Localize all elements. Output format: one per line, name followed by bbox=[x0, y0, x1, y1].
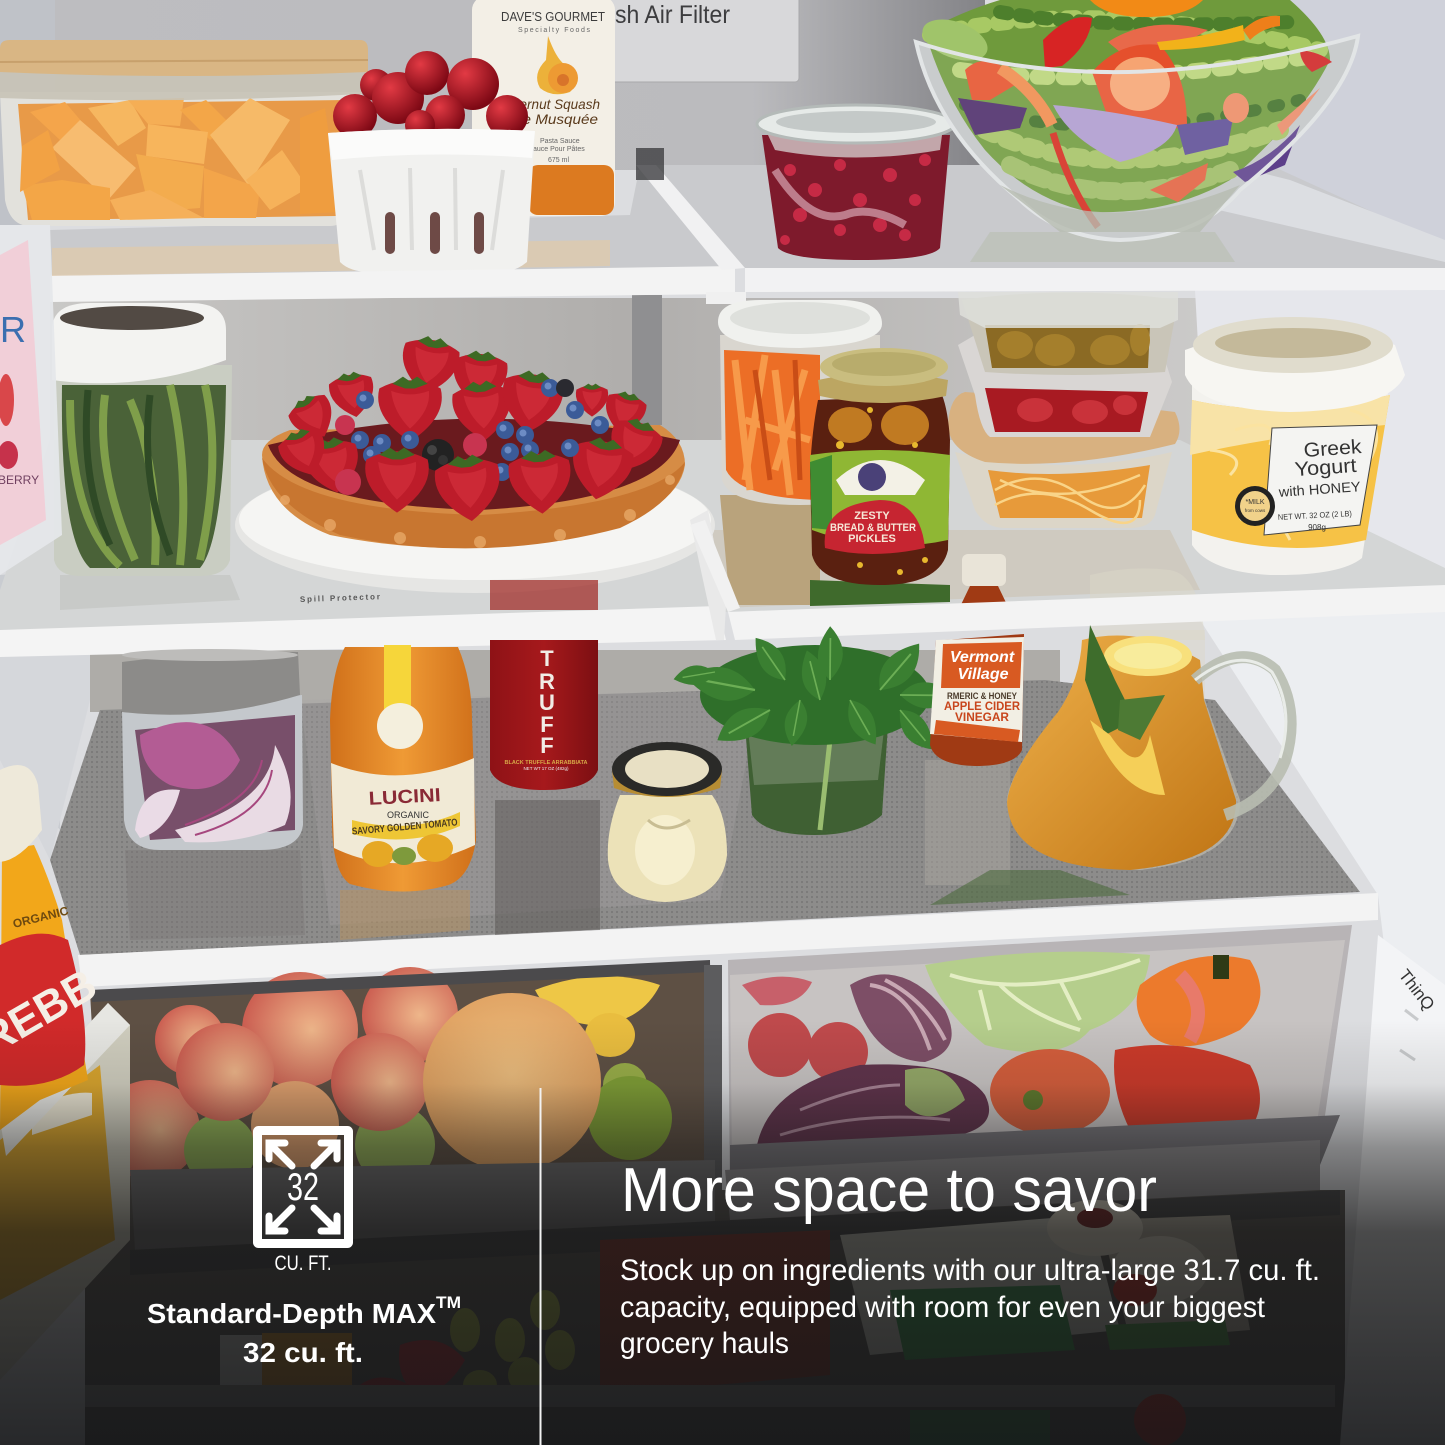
salad bowl bbox=[916, 0, 1358, 240]
Vermont Village vinegar bottle: Village bbox=[958, 666, 1009, 683]
cherries and white basket bbox=[328, 51, 535, 272]
third level mesh floor bbox=[50, 680, 1360, 955]
dark bottom gradient overlay bbox=[0, 1020, 1445, 1445]
orange juice bottle: ORGANIC bbox=[11, 904, 70, 931]
Truff bottle reflection through shelf bbox=[490, 580, 598, 610]
capacity icon bbox=[258, 1130, 348, 1244]
second shelf glass bbox=[0, 440, 1445, 630]
Truff bottle: BLACK TRUFFLE ARRABBIATA bbox=[504, 760, 588, 766]
icon arrows bbox=[269, 1143, 337, 1231]
pickles jar: BREAD & BUTTER bbox=[830, 522, 916, 534]
sauce bottle: auce Pour Pâtes bbox=[533, 146, 585, 153]
orange juice bottle bbox=[0, 765, 105, 1130]
pickles jar bbox=[810, 348, 950, 585]
air filter panel: sh Air Filter bbox=[615, 1, 730, 29]
capacity value: 32 cu. ft. bbox=[243, 1337, 363, 1368]
yogurt tub: Greek bbox=[1303, 436, 1363, 462]
green bean jar bbox=[52, 303, 232, 576]
mayonnaise jar bbox=[608, 742, 727, 902]
icon caption: CU. FT. bbox=[274, 1252, 332, 1275]
yogurt tub bbox=[1185, 317, 1405, 575]
trademark: TM bbox=[436, 1293, 461, 1312]
Truff bottle: T bbox=[540, 646, 554, 671]
sauce bottle: Pasta Sauce bbox=[540, 138, 580, 145]
yogurt tub: with HONEY bbox=[1277, 478, 1362, 500]
Vermont Village vinegar bottle bbox=[930, 634, 1024, 766]
Truff bottle: F bbox=[540, 733, 554, 758]
pomegranate jar bbox=[757, 105, 955, 260]
ThinQ side panel bbox=[1340, 935, 1445, 1445]
Lucini sauce jar: SAVORY GOLDEN TOMATO bbox=[352, 817, 458, 838]
icon number: 32 bbox=[287, 1166, 319, 1209]
yogurt tub: 908g bbox=[1308, 523, 1326, 532]
onion jar bbox=[122, 649, 303, 850]
bottom drawers with groceries bbox=[85, 1140, 1345, 1445]
body copy: capacity, equipped with room for even your biggest bbox=[620, 1291, 1266, 1324]
Lucini sauce jar bbox=[330, 645, 476, 892]
sauce bottle: DAVE'S GOURMET bbox=[501, 10, 605, 24]
Vermont Village vinegar bottle: RMERIC & HONEY bbox=[947, 691, 1017, 701]
Truff bottle: U bbox=[539, 690, 555, 715]
yogurt tub: *MILK bbox=[1245, 499, 1265, 506]
carrot jar bbox=[718, 300, 882, 505]
vinegar cap seen through shelf bbox=[956, 554, 1012, 615]
left door bin with pink carton: R bbox=[0, 309, 26, 350]
left drawer with fruit bbox=[90, 960, 722, 1215]
Vermont Village vinegar bottle: Vermont bbox=[950, 649, 1015, 666]
top shelf front edge bbox=[50, 148, 1445, 304]
left door bin with pink carton bbox=[0, 225, 62, 575]
sauce bottle bbox=[472, 0, 615, 216]
top shelf glass bbox=[50, 165, 1445, 276]
air filter panel bbox=[600, 0, 799, 82]
bottom shelf front edge bbox=[78, 893, 1378, 987]
sauce bottle: Specialty Foods bbox=[518, 27, 590, 34]
yogurt tub: NET WT. 32 OZ (2 LB) bbox=[1278, 509, 1352, 522]
stacked food containers bbox=[948, 292, 1180, 528]
second shelf glass: Spill Protector bbox=[300, 592, 380, 604]
body copy: Stock up on ingredients with our ultra-large 31.7 cu. ft. bbox=[620, 1254, 1320, 1287]
headline: More space to savor bbox=[621, 1156, 1157, 1225]
Truff bottle: R bbox=[539, 669, 555, 694]
Truff bottle: NET WT 17 OZ (482g) bbox=[523, 766, 569, 771]
tart on white plate bbox=[235, 332, 715, 593]
lower left door bin bbox=[0, 1003, 130, 1380]
storage box with cubed squash bbox=[0, 40, 368, 226]
mint in glass bbox=[674, 625, 957, 835]
vertical divider bbox=[540, 1088, 542, 1445]
pickles jar: ZESTY bbox=[854, 510, 890, 522]
pickles jar: PICKLES bbox=[848, 533, 896, 545]
Truff bottle bbox=[490, 640, 598, 790]
Vermont Village vinegar bottle: VINEGAR bbox=[955, 710, 1009, 724]
sauce bottle: ge Musquée bbox=[514, 111, 598, 127]
Truff bottle: F bbox=[540, 712, 554, 737]
second shelf front edge bbox=[0, 510, 1445, 657]
Vermont Village vinegar bottle: APPLE CIDER bbox=[944, 699, 1020, 713]
yogurt tub: from cows bbox=[1245, 508, 1266, 513]
body copy bbox=[620, 1254, 1320, 1360]
sauce bottle: tternut Squash bbox=[512, 96, 600, 112]
yogurt tub: Yogurt bbox=[1294, 455, 1358, 481]
body copy: grocery hauls bbox=[620, 1327, 789, 1360]
sauce bottle: 675 ml bbox=[548, 157, 569, 164]
Lucini sauce jar: LUCINI bbox=[368, 785, 441, 810]
pitcher top seen through shelf bbox=[1090, 568, 1205, 640]
right drawer with vegetables bbox=[728, 925, 1352, 1205]
ThinQ side panel: ThinQ bbox=[1395, 966, 1438, 1014]
Lucini sauce jar: ORGANIC bbox=[387, 810, 429, 820]
product name: Standard-Depth MAX bbox=[147, 1298, 436, 1329]
lemon pitcher bbox=[1007, 625, 1291, 870]
